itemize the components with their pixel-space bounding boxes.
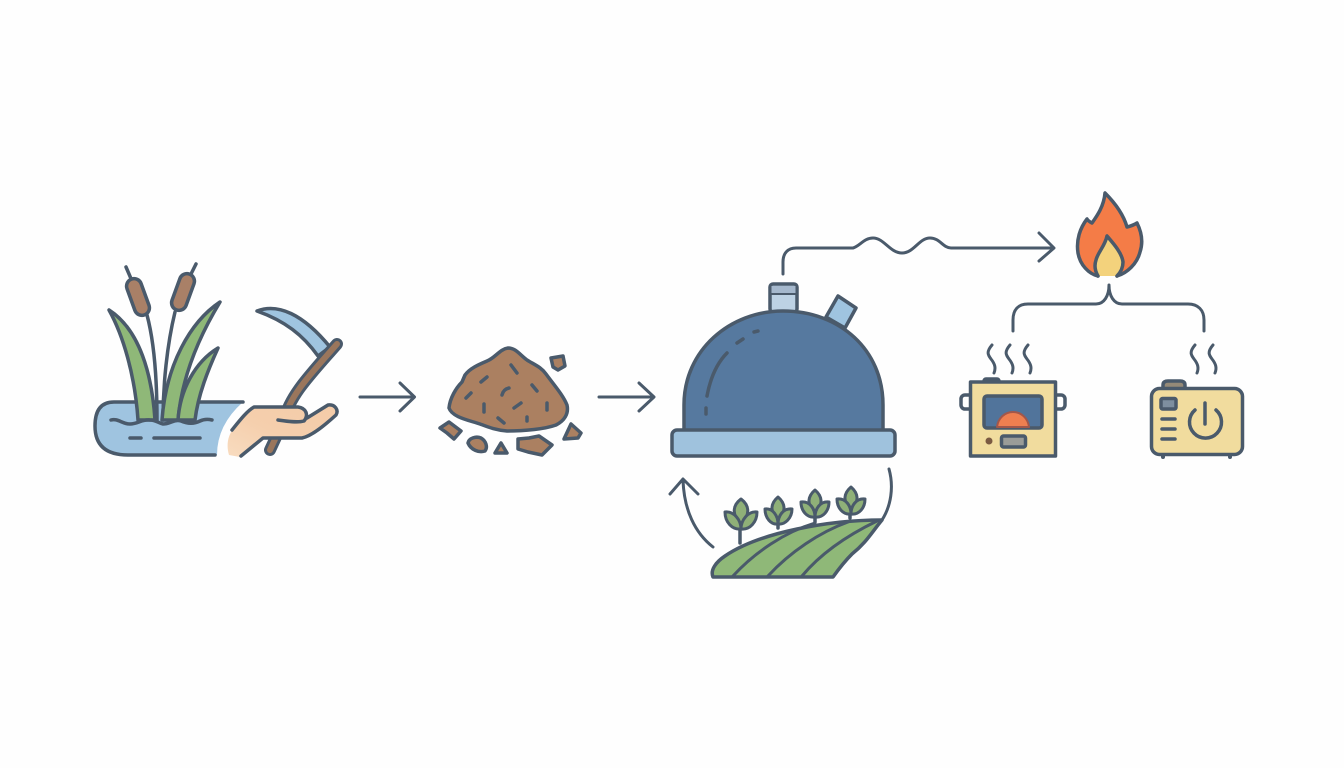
arrow: digestate return arc [882,469,891,520]
stove dial [986,438,992,444]
icon: flame [1077,193,1142,276]
generator indicator lines [1162,419,1175,439]
generator body [1152,388,1242,454]
seedling 4 [837,487,865,514]
stove handles [961,395,973,409]
icon: biomass pile [440,348,581,455]
field furrows [733,521,877,576]
arrow: field return to digester [670,479,713,547]
loose fragments [551,356,565,370]
seedling 3 [801,490,829,517]
pile flecks [466,365,547,423]
arrow: reeds to biomass [360,383,414,411]
scythe blade [257,309,330,356]
icon: hand holding scythe [228,309,337,457]
generator display [1161,398,1176,409]
arrow: flame branching to appliances [1013,285,1204,331]
dome highlights [706,331,758,414]
icon: crop field [712,487,882,577]
icon: pond with reeds [95,264,243,455]
water ripples [111,419,212,424]
generator handle [1163,381,1185,389]
gas outlet chimney [770,284,797,312]
digester base [672,430,895,456]
stove body [970,382,1056,456]
arrow: biomass to digester [599,383,654,411]
power symbol [1189,403,1222,438]
seedling 1 [725,499,757,529]
icon: steam over generator [1191,345,1216,373]
icon: cooking stove [961,379,1065,456]
icon: steam over stove [988,345,1031,373]
dome body [684,311,883,431]
scythe handle [270,344,337,450]
field [712,520,882,577]
cattail stems [147,312,175,420]
stove top knob [984,379,999,383]
pond water [95,402,243,455]
seedling 2 [765,497,792,524]
cattail heads [126,264,196,281]
plant stems [740,502,850,543]
hand [228,405,337,457]
icon: biogas digester dome [672,284,895,456]
generator feet [1163,455,1230,457]
angled side pipe [826,296,856,328]
arrow: biogas pipe to flame [783,233,1054,274]
stove window [984,396,1042,428]
pile body [449,348,567,431]
stove button [1002,436,1026,447]
burner glow [997,412,1029,427]
icon: power generator [1152,381,1242,457]
outer flame [1077,193,1142,276]
reed leaves [109,310,155,420]
inner flame [1095,236,1123,276]
